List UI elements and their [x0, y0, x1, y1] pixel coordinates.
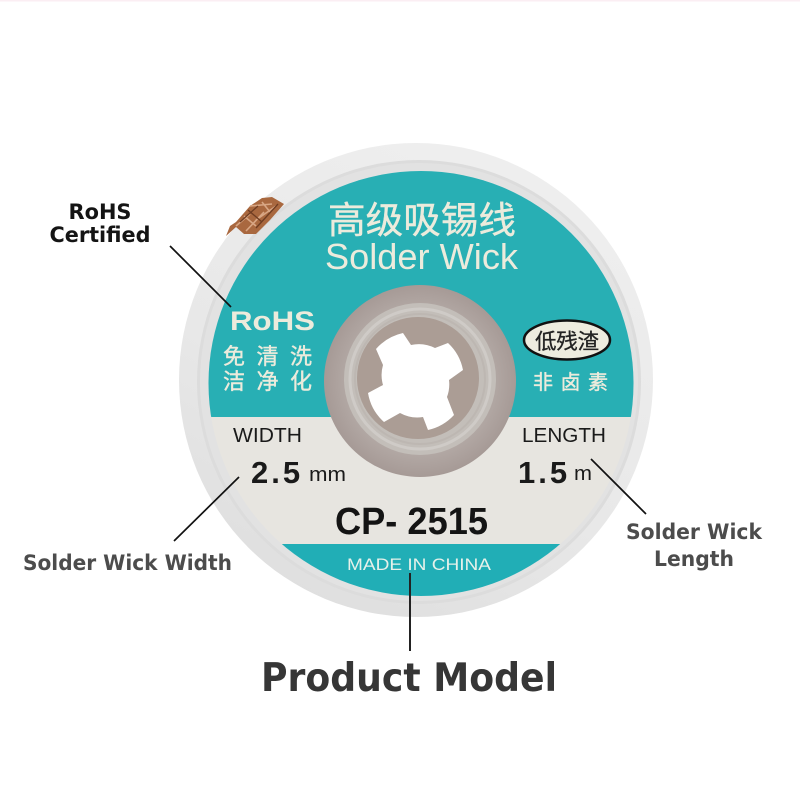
badge: low residue: [524, 320, 610, 360]
length spec: [518, 425, 606, 490]
callout: RoHS Certified: [50, 200, 231, 307]
length spec: 1.5: [518, 455, 570, 490]
no-clean text: 免清洗: [223, 344, 312, 369]
callout: Solder Wick Length: Solder Wick: [626, 520, 763, 544]
no-clean text: 洁净化: [223, 369, 312, 394]
width spec: WIDTH: [233, 425, 302, 447]
title: Solder Wick: Solder Wick: [325, 236, 519, 277]
spool centre hole: [368, 333, 463, 430]
model number: CP- 2515: [335, 501, 488, 543]
callout: RoHS Certified: RoHS: [68, 200, 132, 224]
callout: Product Model: Product Model: [261, 656, 557, 701]
callout: Solder Wick Width: [23, 477, 239, 575]
hub: [324, 285, 516, 477]
icon: copper wick: [226, 197, 284, 236]
title: Chinese: 高级吸锡线: [328, 200, 516, 241]
no-clean text: [223, 344, 312, 394]
RoHS mark: RoHS: [230, 306, 315, 336]
length spec: LENGTH: [522, 425, 606, 447]
callout: Solder Wick Width: Solder Wick Width: [23, 551, 232, 575]
width spec: 2.5: [251, 455, 303, 490]
halogen free text: 非卤素: [533, 371, 608, 394]
callout: Solder Wick Length: Length: [654, 547, 734, 571]
width spec: [233, 425, 346, 490]
width spec: mm: [309, 464, 346, 486]
callout: Solder Wick Length: [591, 459, 763, 571]
length spec: m: [574, 463, 592, 485]
spool: [179, 143, 653, 617]
made in china: MADE IN CHINA: [347, 555, 492, 574]
callout: RoHS Certified: Certified: [50, 223, 150, 247]
badge: low residue: 低残渣: [535, 330, 599, 354]
label disc: [200, 160, 650, 604]
